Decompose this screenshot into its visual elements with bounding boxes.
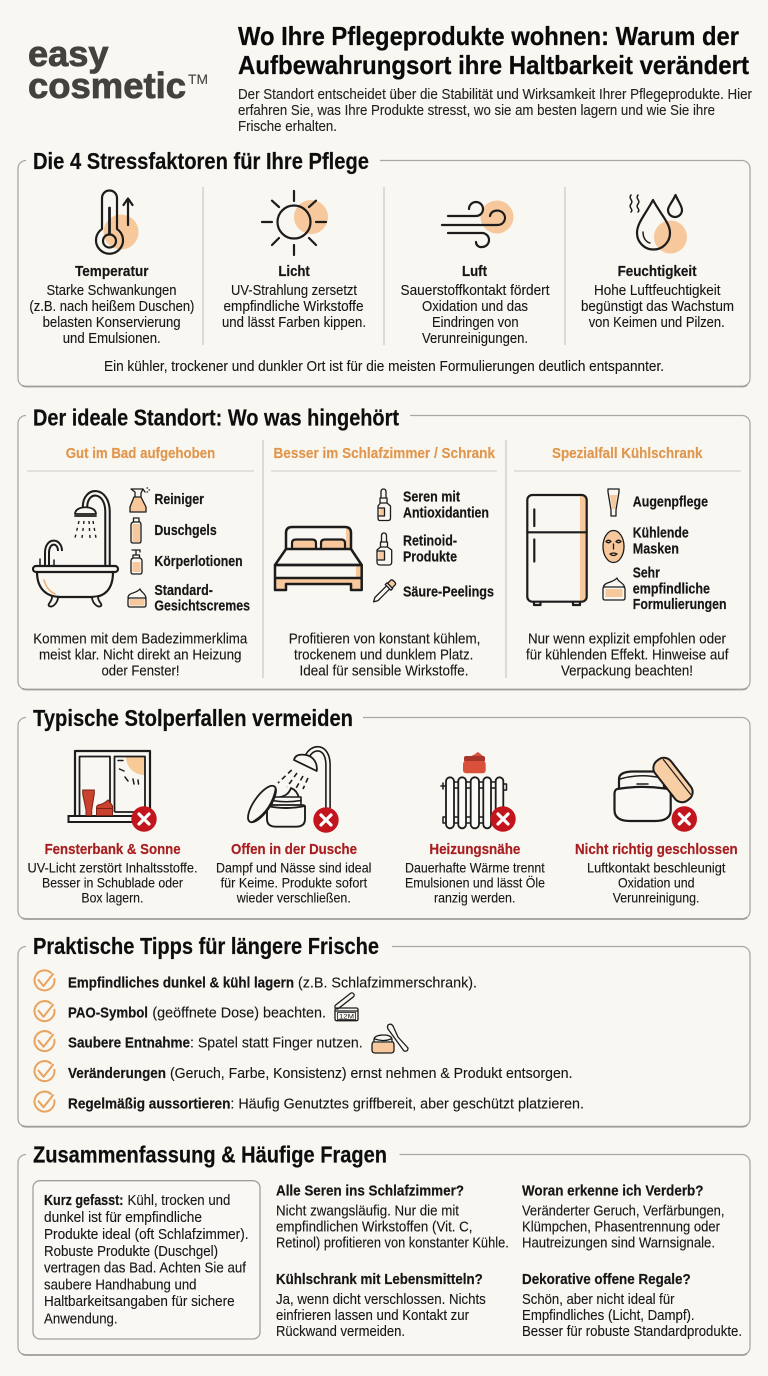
faq: open shelves: Schön, aber nicht ideal für bbox=[522, 1291, 674, 1308]
icon: cooling mask bbox=[603, 530, 624, 562]
tip 5: Regelmäßig aussortieren bbox=[68, 1095, 230, 1112]
faq: serums: Alle Seren ins Schlafzimmer? bbox=[276, 1183, 464, 1200]
text: Temperatur: Starke Schwankungen bbox=[46, 282, 176, 299]
text: Feuchtigkeit: Feuchtigkeit bbox=[618, 263, 697, 280]
text: window sill: Besser in Schublade oder bbox=[42, 875, 183, 891]
text: fridge note: für kühlenden Effekt. Hinweise auf bbox=[526, 646, 729, 663]
logo: easy cosmetic: easy bbox=[28, 33, 109, 74]
icon: thermometer bbox=[96, 191, 138, 254]
faq: fridge with food: Ja, wenn dicht verschlossen. Nichts bbox=[276, 1291, 486, 1308]
label: Seren mit Antioxidantien: Antioxidantien bbox=[403, 505, 489, 522]
text: not closed: Verunreinigung. bbox=[613, 890, 700, 906]
text: Feuchtigkeit: von Keimen und Pilzen. bbox=[589, 314, 725, 331]
text: Luft: Luft bbox=[462, 263, 487, 280]
heading: summary: Zusammenfassung & Häufige Fragen bbox=[33, 1142, 387, 1168]
text: Feuchtigkeit: begünstigt das Wachstum bbox=[581, 298, 734, 315]
text: bedroom note: trockenem und dunklem Platz. bbox=[294, 646, 473, 663]
label: Kühlende Masken: Kühlende bbox=[633, 525, 689, 542]
faq: fridge with food: Rückwand vermeiden. bbox=[276, 1323, 405, 1340]
label: Kühlende Masken: Masken bbox=[633, 540, 679, 557]
icon: jar with spatula bbox=[372, 1024, 408, 1053]
text: window sill bbox=[28, 841, 198, 906]
icon: window with sun and products bbox=[68, 751, 157, 832]
text: window sill: Fensterbank & Sonne bbox=[45, 841, 181, 858]
box: short summary: Anwendung. bbox=[44, 1310, 118, 1327]
icon: face cream jar bbox=[128, 589, 146, 607]
text: Feuchtigkeit: Hohe Luftfeuchtigkeit bbox=[594, 282, 721, 299]
intro text: Frische erhalten. bbox=[238, 118, 337, 135]
box: short summary: Kühl, trocken und bbox=[128, 1192, 230, 1209]
box: short summary: Robuste Produkte (Duschgel) bbox=[44, 1243, 218, 1260]
heading: pitfalls: Typische Stolperfallen vermeiden bbox=[33, 705, 353, 731]
label: Augenpflege: Augenpflege bbox=[633, 494, 708, 511]
label: very sensitive formulations bbox=[633, 564, 726, 613]
text: Temperatur: und Emulsionen. bbox=[63, 330, 161, 347]
box: short summary: Produkte ideal (oft Schlafzimmer). bbox=[44, 1226, 248, 1243]
text: window sill: UV-Licht zerstört Inhaltsstoffe. bbox=[28, 859, 198, 875]
faq: open shelves: Dekorative offene Regale? bbox=[522, 1271, 691, 1288]
faq: spoilage: Woran erkenne ich Verderb? bbox=[522, 1183, 703, 1200]
text: open in shower: Offen in der Dusche bbox=[231, 841, 357, 858]
text: not closed bbox=[575, 841, 738, 906]
logo: easy cosmetic: cosmetic bbox=[28, 65, 186, 106]
items: bath bbox=[128, 488, 250, 615]
icon: droplets bbox=[630, 195, 687, 254]
text: Temperatur bbox=[29, 263, 194, 347]
icon: retinoid dropper bbox=[377, 533, 392, 565]
tip 2 bbox=[34, 992, 358, 1021]
text: Luft: Eindringen von bbox=[432, 314, 519, 331]
faq: serums: Retinol) profitieren von konstanter Kühle. bbox=[276, 1235, 509, 1252]
text: Luft: Oxidation und das bbox=[422, 298, 528, 315]
tip 4 bbox=[34, 1061, 573, 1082]
text: Licht: Licht bbox=[278, 263, 310, 280]
heading: tips: Praktische Tipps für längere Frische bbox=[33, 933, 379, 959]
faq: serums bbox=[276, 1183, 509, 1252]
text: bedroom note: Ideal für sensible Wirkstoffe. bbox=[300, 662, 468, 679]
column heading: fridge: Spezialfall Kühlschrank bbox=[552, 445, 703, 462]
label: Duschgels: Duschgels bbox=[154, 522, 217, 539]
text: fridge note: Nur wenn explizit empfohlen oder bbox=[528, 630, 726, 647]
text: radiator: Heizungsnähe bbox=[429, 841, 520, 858]
faq: open shelves bbox=[522, 1271, 742, 1340]
box: short summary: Kurz gefasst: bbox=[44, 1192, 124, 1209]
tip 3: : Spatel statt Finger nutzen. bbox=[190, 1035, 363, 1052]
text: stress summary: Ein kühler, trockener und dunkler Ort ist für die meisten Formulierungen deutlich entspannter. bbox=[104, 358, 664, 375]
text: Luft bbox=[400, 263, 550, 347]
icon: wind bbox=[442, 200, 514, 247]
text: radiator: Emulsionen und lässt Öle bbox=[405, 874, 545, 891]
faq: open shelves: Besser für robuste Standardprodukte. bbox=[522, 1323, 742, 1340]
icon: bed bbox=[275, 527, 362, 590]
label: Reiniger: Reiniger bbox=[154, 491, 204, 508]
text: open in shower bbox=[216, 841, 371, 906]
text: not closed: Luftkontakt beschleunigt bbox=[587, 859, 726, 875]
faq: open shelves: Empfindliches (Licht, Dampf). bbox=[522, 1307, 695, 1324]
faq: fridge with food bbox=[276, 1271, 486, 1340]
label: very sensitive formulations: Formulierungen bbox=[633, 596, 726, 613]
faq: spoilage: Hautreizungen sind Warnsignale. bbox=[522, 1235, 715, 1252]
icon: jar with loose lid bbox=[614, 754, 697, 832]
icon: PAO jar: 12M bbox=[339, 1014, 354, 1020]
label: Seren mit Antioxidantien: Seren mit bbox=[403, 489, 460, 506]
icon: sun bbox=[262, 191, 328, 255]
icon: shower gel bbox=[131, 518, 141, 543]
label: Standard-Gesichtscremes bbox=[154, 582, 250, 615]
text: Licht: UV-Strahlung zersetzt bbox=[231, 282, 358, 299]
box: short summary: Haltbarkeitsangaben für sichere bbox=[44, 1293, 235, 1310]
faq: spoilage: Veränderter Geruch, Verfärbungen, bbox=[522, 1203, 724, 1220]
label: Retinoid-Produkte: Retinoid- bbox=[403, 533, 457, 550]
label: Kühlende Masken bbox=[633, 525, 689, 557]
badge: X bbox=[672, 806, 697, 832]
text: Luft: Sauerstoffkontakt fördert bbox=[400, 282, 550, 299]
box: short summary: vertragen das Bad. Achten Sie auf bbox=[44, 1260, 247, 1277]
text: fridge note bbox=[526, 630, 729, 679]
faq: fridge with food: Kühlschrank mit Lebensmitteln? bbox=[276, 1271, 483, 1288]
icon: open jar in shower bbox=[243, 749, 339, 833]
tip 4: (Geruch, Farbe, Konsistenz) ernst nehmen & Produkt entsorgen. bbox=[170, 1065, 572, 1082]
text: open in shower: wieder verschließen. bbox=[236, 890, 351, 906]
tip 2: PAO-Symbol bbox=[68, 1004, 148, 1021]
faq: spoilage bbox=[522, 1183, 724, 1252]
box: short summary: saubere Handhabung und bbox=[44, 1276, 196, 1293]
column heading: bedroom: Besser im Schlafzimmer / Schrank bbox=[274, 445, 496, 462]
items: fridge bbox=[603, 489, 726, 613]
label: Seren mit Antioxidantien bbox=[403, 489, 489, 522]
text: bath note bbox=[33, 630, 248, 679]
faq: serums: empfindlichen Wirkstoffen (Vit. C, bbox=[276, 1219, 472, 1236]
icon: sensitive cream jar bbox=[603, 578, 625, 600]
panel: ideal location bbox=[18, 404, 750, 690]
badge: X bbox=[490, 806, 516, 832]
panel: practical tips bbox=[18, 933, 750, 1127]
text: bedroom note: Profitieren von konstant kühlem, bbox=[289, 630, 480, 647]
icon: bathtub with shower bbox=[33, 493, 118, 607]
text: Temperatur: Temperatur bbox=[75, 263, 149, 280]
text: Temperatur: belasten Konservierung bbox=[43, 314, 181, 331]
badge: X bbox=[313, 807, 339, 833]
tip 1 bbox=[34, 970, 477, 991]
text: open in shower: Dampf und Nässe sind ideal bbox=[216, 859, 371, 875]
panel: summary and FAQ bbox=[18, 1142, 750, 1355]
icon: pump bottle bbox=[131, 550, 142, 574]
icon: PAO jar bbox=[334, 992, 358, 1021]
icon: spray bottle bbox=[130, 488, 150, 512]
tip 4: Veränderungen bbox=[68, 1065, 166, 1082]
text: radiator: ranzig werden. bbox=[434, 890, 515, 906]
label: Körperlotionen: Körperlotionen bbox=[154, 553, 243, 570]
logo: easy cosmetic: TM bbox=[188, 71, 208, 87]
text: radiator bbox=[405, 841, 545, 906]
text: not closed: Nicht richtig geschlossen bbox=[575, 841, 738, 858]
label: very sensitive formulations: Sehr bbox=[633, 564, 660, 581]
intro text bbox=[238, 86, 752, 135]
tip 1: (z.B. Schlafzimmerschrank). bbox=[298, 974, 477, 991]
faq: fridge with food: einfrieren lassen und Kontakt zur bbox=[276, 1307, 469, 1324]
tip 2: (geöffnete Dose) beachten. bbox=[152, 1004, 326, 1021]
tip 1: Empfindliches dunkel & kühl lagern bbox=[68, 974, 294, 991]
panel: stress factors bbox=[18, 148, 750, 386]
icon: pipette bbox=[371, 579, 397, 605]
text: radiator: Dauerhafte Wärme trennt bbox=[405, 859, 545, 875]
text: Luft: Verunreinigungen. bbox=[422, 330, 528, 347]
label: very sensitive formulations: empfindliche bbox=[633, 580, 710, 597]
title bbox=[238, 21, 749, 80]
label: Retinoid-Produkte: Produkte bbox=[403, 549, 457, 566]
logo: easy cosmetic bbox=[28, 33, 208, 106]
intro text: erfahren Sie, was Ihre Produkte stresst, wo sie am besten lagern und wie Sie ihre bbox=[238, 102, 715, 119]
text: Temperatur: (z.B. nach heißem Duschen) bbox=[29, 298, 194, 315]
text: Licht: empfindliche Wirkstoffe bbox=[224, 298, 364, 315]
items: bedroom bbox=[371, 489, 494, 605]
text: bedroom note bbox=[289, 630, 480, 679]
label: Standard-Gesichtscremes: Gesichtscremes bbox=[154, 598, 250, 615]
badge: X bbox=[131, 806, 157, 832]
tip 5: : Häufig Genutztes griffbereit, aber geschützt platzieren. bbox=[230, 1095, 584, 1112]
text: open in shower: für Keime. Produkte sofort bbox=[221, 875, 367, 891]
text: fridge note: Verpackung beachten! bbox=[561, 662, 693, 679]
heading: ideal location: Der ideale Standort: Wo was hingehört bbox=[33, 404, 399, 430]
text: Feuchtigkeit bbox=[581, 263, 734, 331]
text: bath note: oder Fenster! bbox=[102, 662, 180, 679]
tip 3 bbox=[34, 1024, 408, 1053]
icon: eye cream tube bbox=[608, 489, 619, 516]
text: bath note: meist klar. Nicht direkt an Heizung bbox=[39, 646, 242, 663]
tip 3: Saubere Entnahme bbox=[68, 1035, 190, 1052]
box: short summary bbox=[33, 1181, 260, 1339]
icon: jar on radiator bbox=[441, 752, 516, 832]
icon: serum dropper bbox=[378, 489, 390, 520]
tip 5 bbox=[34, 1092, 584, 1112]
text: Licht: und lässt Farben kippen. bbox=[222, 314, 366, 331]
label: Retinoid-Produkte bbox=[403, 533, 457, 566]
text: bath note: Kommen mit dem Badezimmerklima bbox=[33, 630, 248, 647]
panel: common pitfalls bbox=[18, 705, 750, 919]
column heading: bath: Gut im Bad aufgehoben bbox=[66, 445, 215, 462]
text: not closed: Oxidation und bbox=[618, 875, 695, 891]
box: short summary: dunkel ist für empfindliche bbox=[44, 1209, 202, 1226]
heading: stress factors: Die 4 Stressfaktoren für Ihre Pflege bbox=[33, 148, 369, 174]
text: Licht bbox=[222, 263, 366, 331]
faq: spoilage: Klümpchen, Phasentrennung oder bbox=[522, 1219, 720, 1236]
faq: serums: Nicht zwangsläufig. Nur die mit bbox=[276, 1203, 460, 1220]
label: Säure-Peelings: Säure-Peelings bbox=[403, 584, 494, 601]
icon: fridge bbox=[527, 495, 587, 605]
text: window sill: Box lagern. bbox=[81, 890, 143, 906]
label: Standard-Gesichtscremes: Standard- bbox=[154, 582, 213, 599]
